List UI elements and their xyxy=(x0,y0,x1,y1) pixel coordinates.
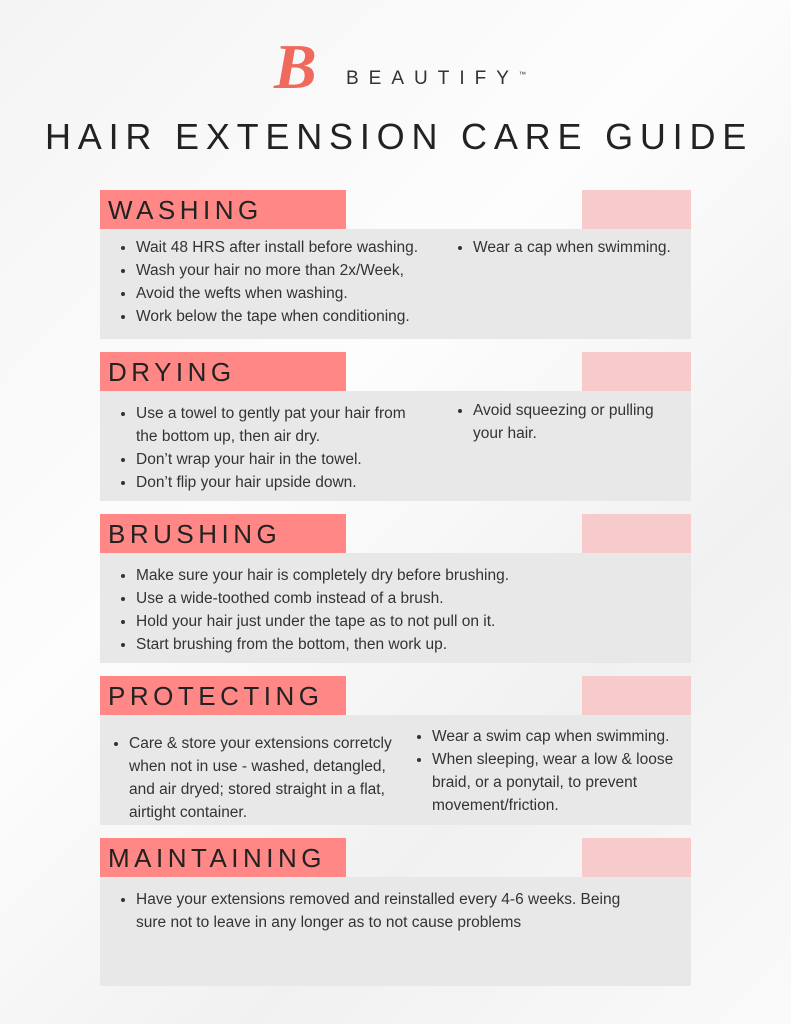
heading: brushing xyxy=(100,514,346,553)
list: washing left xyxy=(121,239,418,325)
heading: maintaining xyxy=(100,838,346,877)
list: protecting left: Care & store your extensions corretcly when not in use - washed, detangled, and air dryed; stored straight in a flat, airtight container. xyxy=(129,735,392,821)
list: brushing: Use a wide-toothed comb instead of a brush. xyxy=(136,590,444,607)
list: washing left: Wait 48 HRS after install before washing. xyxy=(136,239,418,256)
heading: drying: DRYING xyxy=(108,357,236,387)
list: drying left: Use a towel to gently pat your hair from the bottom up, then air dry. xyxy=(136,405,406,445)
panel: protecting xyxy=(100,676,691,825)
heading: drying xyxy=(100,352,346,391)
panel: drying xyxy=(100,352,691,501)
heading: protecting xyxy=(100,676,346,715)
list: brushing: Hold your hair just under the tape as to not pull on it. xyxy=(136,613,495,630)
list: brushing: Start brushing from the bottom, then work up. xyxy=(136,636,447,653)
list: drying right: Avoid squeezing or pulling your hair. xyxy=(473,402,654,442)
heading: washing xyxy=(100,190,346,229)
list: drying left xyxy=(121,405,406,491)
panel: brushing xyxy=(100,514,691,663)
heading: washing: WASHING xyxy=(108,195,263,225)
list: protecting right: When sleeping, wear a low & loose braid, or a ponytail, to prevent movement/friction. xyxy=(432,751,673,814)
heading: brushing: BRUSHING xyxy=(108,519,281,549)
list: washing right: Wear a cap when swimming. xyxy=(473,239,671,256)
list: washing left: Avoid the wefts when washing. xyxy=(136,285,348,302)
heading: maintaining: MAINTAINING xyxy=(108,843,326,873)
list: washing left: Wash your hair no more than 2x/Week, xyxy=(136,262,404,279)
title: HAIR EXTENSION CARE GUIDE xyxy=(45,116,753,157)
logo mark: B: B xyxy=(274,31,317,102)
logo xyxy=(273,31,526,102)
list: protecting right: Wear a swim cap when swimming. xyxy=(432,728,669,745)
list: drying left: Don’t flip your hair upside down. xyxy=(136,474,357,491)
heading: protecting: PROTECTING xyxy=(108,681,323,711)
list: brushing xyxy=(121,567,509,653)
list: drying left: Don’t wrap your hair in the towel. xyxy=(136,451,362,468)
panel: washing xyxy=(100,190,691,339)
panel: maintaining xyxy=(100,838,691,986)
list: protecting right xyxy=(417,728,673,814)
list: maintaining: Have your extensions removed and reinstalled every 4-6 weeks. Being sure not to leave in any longer as to not cause problems xyxy=(136,891,620,931)
logo wordmark: BEAUTIFY™ xyxy=(346,68,526,89)
list: brushing: Make sure your hair is completely dry before brushing. xyxy=(136,567,509,584)
list: washing left: Work below the tape when conditioning. xyxy=(136,308,410,325)
